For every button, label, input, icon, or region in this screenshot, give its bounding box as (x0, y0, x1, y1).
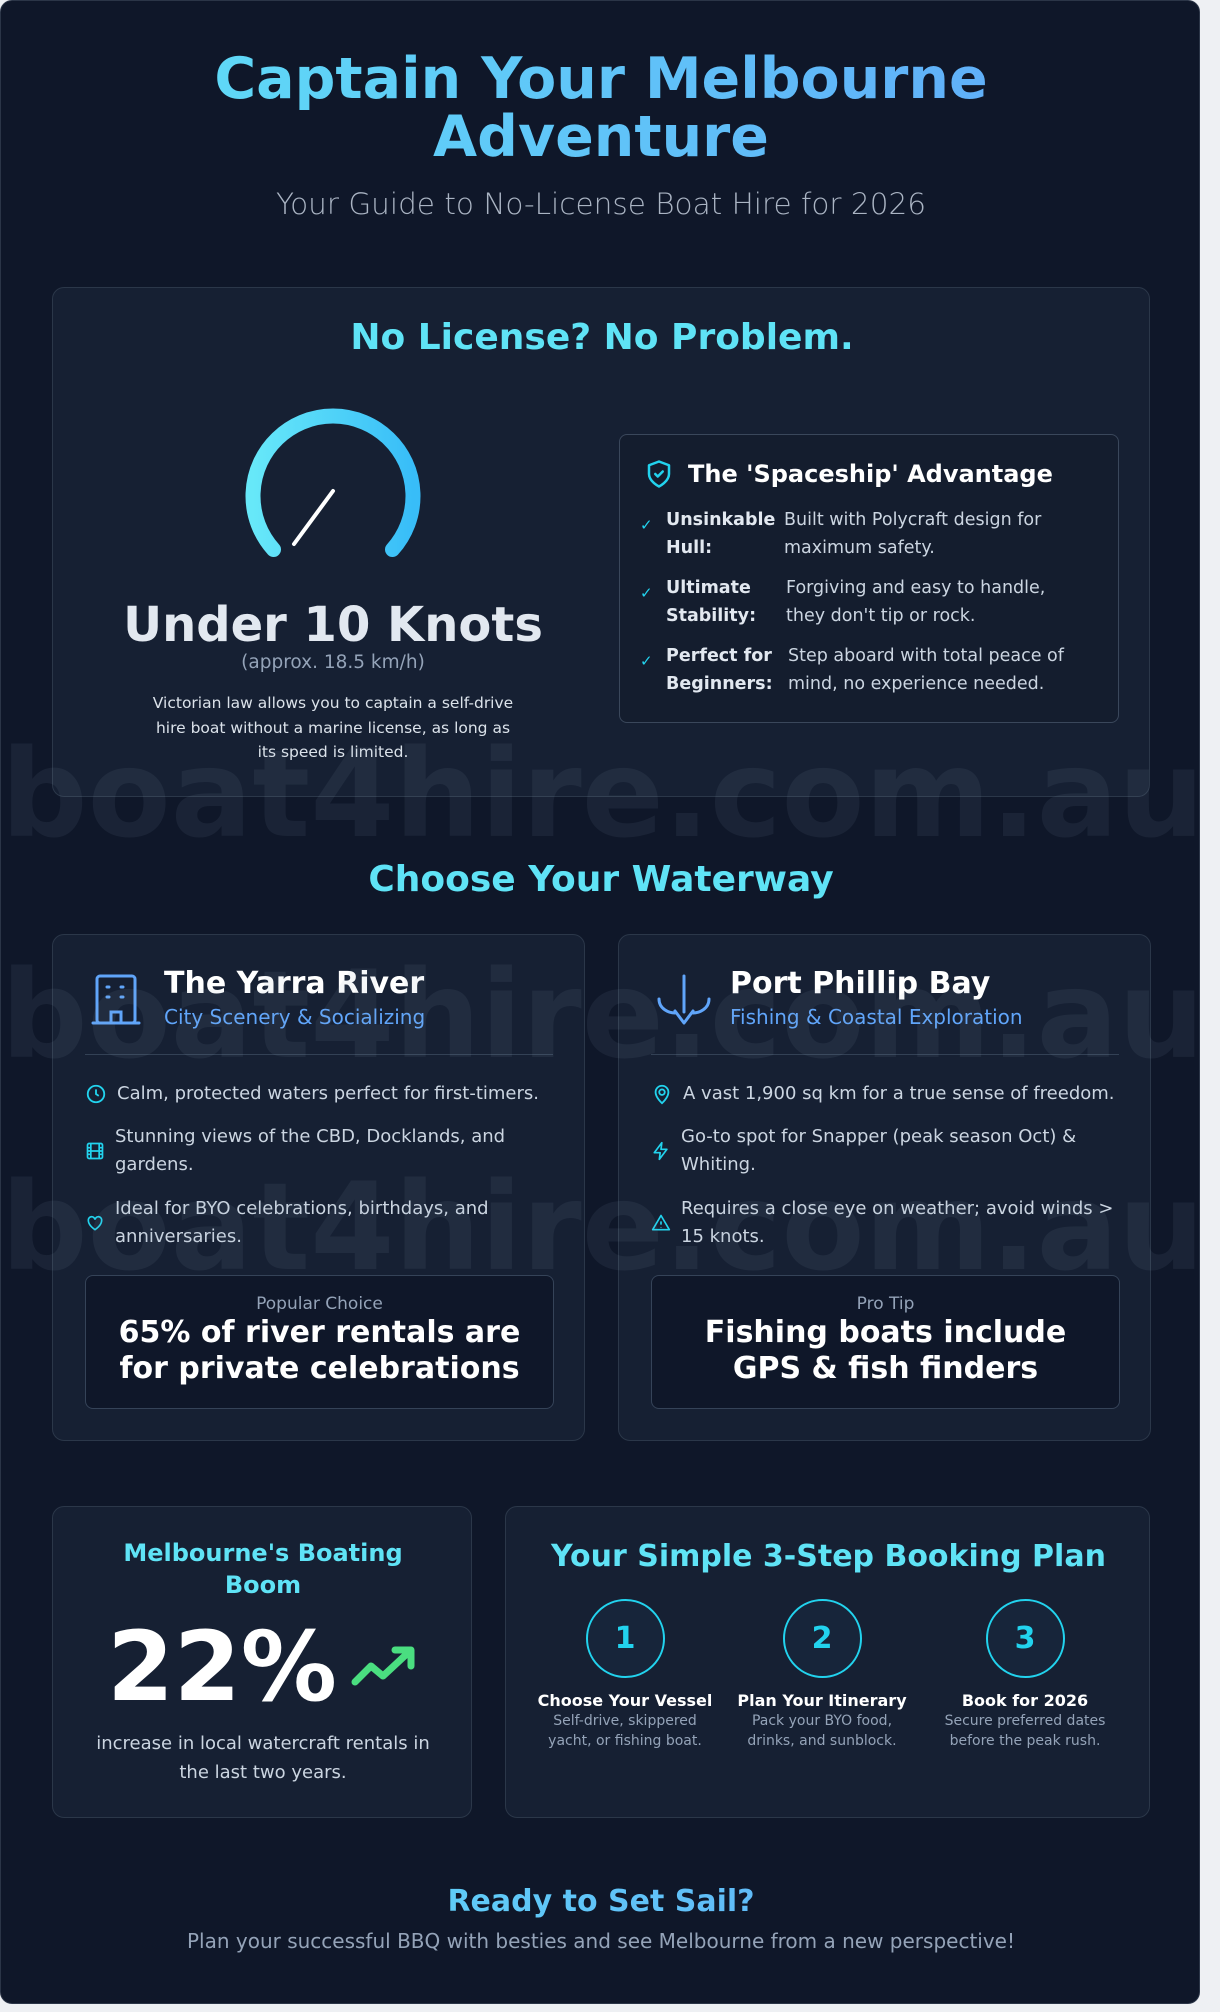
heading: no license: No License? No Problem. (350, 317, 854, 358)
description: increase in local watercraft rentals in the last two years. (96, 1733, 430, 1783)
item: beginners: Step aboard with total peace of mind, no experience needed. (788, 646, 1064, 694)
speed conversion: (approx. 18.5 km/h) (241, 652, 425, 673)
step 1: Self-drive, skippered (553, 1713, 697, 1729)
title: The Yarra River (164, 966, 424, 1001)
callout: pro tip: Pro Tip (857, 1294, 914, 1314)
heading (123, 1539, 403, 1599)
step 3: before the peak rush. (950, 1733, 1100, 1749)
description: Victorian law allows you to captain a self-drive hire boat without a marine license, as long as its speed is limited. (153, 694, 513, 761)
panel: yarra river (52, 934, 585, 1441)
title (1, 50, 1201, 166)
footer heading: Ready to Set Sail? (447, 1884, 755, 1919)
callout: pro tip (651, 1275, 1120, 1409)
big stat: under 10 knots: Under 10 Knots (123, 597, 543, 653)
item: ultimate stability: ✓ (640, 584, 653, 602)
item: views: Stunning views of the CBD, Docklands, and gardens. (115, 1126, 505, 1175)
heading: Your Simple 3-Step Booking Plan (551, 1539, 1106, 1574)
item: beginners: Perfect for Beginners: (666, 646, 773, 694)
item: ultimate stability: Forgiving and easy to handle, they don't tip or rock. (786, 578, 1045, 626)
panel: booking plan (505, 1506, 1150, 1818)
big stat: 22% with trend arrow: 22% (107, 1611, 337, 1723)
gauge icon (246, 408, 420, 557)
item: ultimate stability: Ultimate Stability: (666, 578, 756, 626)
title: Adventure (433, 104, 769, 170)
subtitle: Fishing & Coastal Exploration (730, 1005, 1023, 1029)
item: unsinkable hull (640, 510, 1042, 558)
icon: building (92, 974, 140, 1024)
watermark row 2: boat4hire.com.au (1, 945, 1200, 1086)
panel: boating boom (52, 1506, 472, 1818)
heading: Melbourne's Boating (123, 1539, 403, 1567)
step 3: 3 (1015, 1621, 1035, 1656)
item: snapper: Go-to spot for Snapper (peak season Oct) & Whiting. (681, 1126, 1076, 1175)
heading with shield icon: The 'Spaceship' Advantage (688, 460, 1053, 488)
item: celebrations: Ideal for BYO celebrations, birthdays, and anniversaries. (115, 1198, 489, 1247)
step 3 (945, 1599, 1105, 1749)
box: spaceship advantage (619, 434, 1119, 723)
watermark row 3: boat4hire.com.au (1, 1157, 1200, 1298)
step 2: Plan Your Itinerary (737, 1691, 907, 1710)
subtitle: City Scenery & Socializing (164, 1005, 425, 1029)
step 3: Book for 2026 (962, 1691, 1088, 1710)
item: unsinkable hull: Built with Polycraft design for maximum safety. (784, 510, 1041, 558)
step 2: drinks, and sunblock. (747, 1733, 897, 1749)
subtitle: Your Guide to No-License Boat Hire for 2026 (276, 187, 926, 221)
watermark row 1: boat4hire.com.au (1, 724, 1200, 865)
callout: popular choice: 65% of river rentals are (119, 1315, 520, 1350)
item: calm waters: Calm, protected waters perfect for first-timers. (117, 1083, 539, 1104)
callout: popular choice: for private celebrations (119, 1351, 520, 1386)
item: vast area: A vast 1,900 sq km for a true sense of freedom. (683, 1083, 1115, 1104)
step 2: 2 (812, 1621, 832, 1656)
step 1 (538, 1599, 712, 1749)
step 2 (737, 1599, 907, 1749)
title: Captain Your Melbourne (214, 46, 988, 112)
panel: port phillip bay (618, 934, 1151, 1441)
item: weather warning: Requires a close eye on weather; avoid winds > 15 knots. (681, 1198, 1113, 1247)
panel: no license (52, 287, 1150, 797)
callout: pro tip: GPS & fish finders (733, 1351, 1038, 1386)
item: unsinkable hull: Unsinkable Hull: (666, 510, 775, 558)
step 3: Secure preferred dates (945, 1713, 1105, 1729)
callout: pro tip: Fishing boats include (705, 1315, 1066, 1350)
heading: choose your waterway: Choose Your Waterway (368, 859, 834, 900)
footer heading (1, 1883, 1201, 1921)
step 2: Pack your BYO food, (752, 1713, 892, 1729)
item: beginners: ✓ (640, 652, 653, 670)
item: ultimate stability (640, 578, 1045, 626)
callout: popular choice (85, 1275, 554, 1409)
title: Port Phillip Bay (730, 966, 990, 1001)
footer tagline: Plan your successful BBQ with besties and see Melbourne from a new perspective! (187, 1929, 1015, 1953)
icon: anchor (658, 974, 710, 1025)
item: beginners (640, 646, 1064, 694)
item: unsinkable hull: ✓ (640, 516, 653, 534)
heading: Boom (225, 1571, 301, 1599)
step 1: Choose Your Vessel (538, 1691, 712, 1710)
callout: popular choice: Popular Choice (256, 1294, 383, 1314)
step 1: yacht, or fishing boat. (548, 1733, 702, 1749)
step 1: 1 (615, 1621, 635, 1656)
